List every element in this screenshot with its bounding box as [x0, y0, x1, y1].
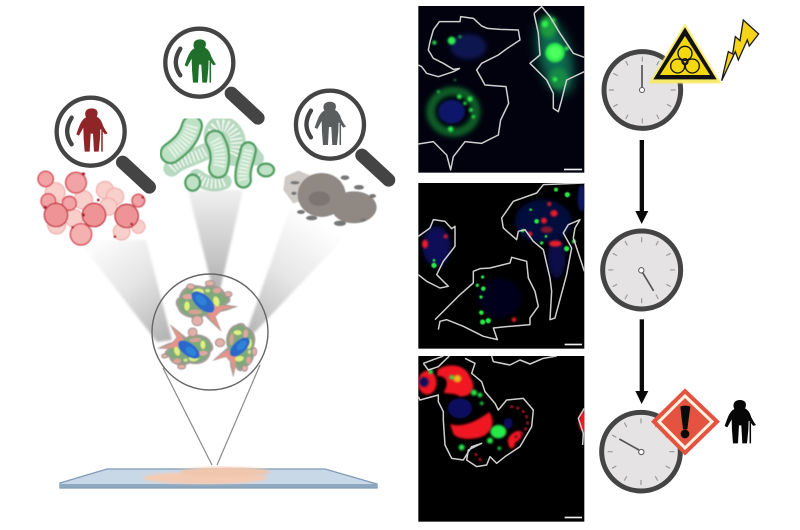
icon: biohazard warning sign [649, 23, 721, 83]
beam: right [248, 208, 346, 333]
magnified cells circle [152, 274, 268, 390]
green mitochondria cluster [171, 125, 274, 191]
icon: red hazard diamond [651, 388, 720, 456]
zoom lines to slide [163, 365, 260, 465]
scale bar [564, 169, 582, 170]
fluorescent signal, top panel [431, 15, 580, 132]
glass slide with cells [60, 467, 377, 488]
grey aggregate cluster [283, 171, 377, 226]
magnifier: red person [57, 98, 149, 187]
beam: left [78, 240, 172, 342]
panel: light beams and cell magnification [38, 29, 389, 488]
fluorescent signal, middle panel [422, 185, 586, 325]
arrow 2 [635, 319, 648, 404]
panel: micrograph 2 [418, 183, 586, 349]
red lipid droplet cluster [38, 171, 145, 245]
cell outlines, bottom panel [418, 356, 584, 467]
panel: micrograph 1 [418, 6, 584, 173]
panel: micrograph 3 [418, 356, 589, 522]
clock 2 [603, 231, 681, 309]
magnifier: grey person [296, 91, 389, 180]
scale bar [565, 344, 582, 345]
arrow 1 [635, 140, 648, 224]
icon: lightning bolt [722, 20, 759, 81]
scale bar [565, 517, 582, 518]
icon: elderly person [725, 400, 755, 443]
clock 1 [604, 52, 681, 128]
panel: timeline with clocks [602, 20, 759, 491]
cell outlines, middle panel [418, 183, 584, 340]
fluorescent signal, bottom panel [418, 365, 589, 462]
beam: middle [188, 190, 243, 290]
clock 3 [602, 412, 680, 491]
magnifier: green person [165, 29, 258, 118]
cell outlines, top panel [418, 7, 584, 170]
